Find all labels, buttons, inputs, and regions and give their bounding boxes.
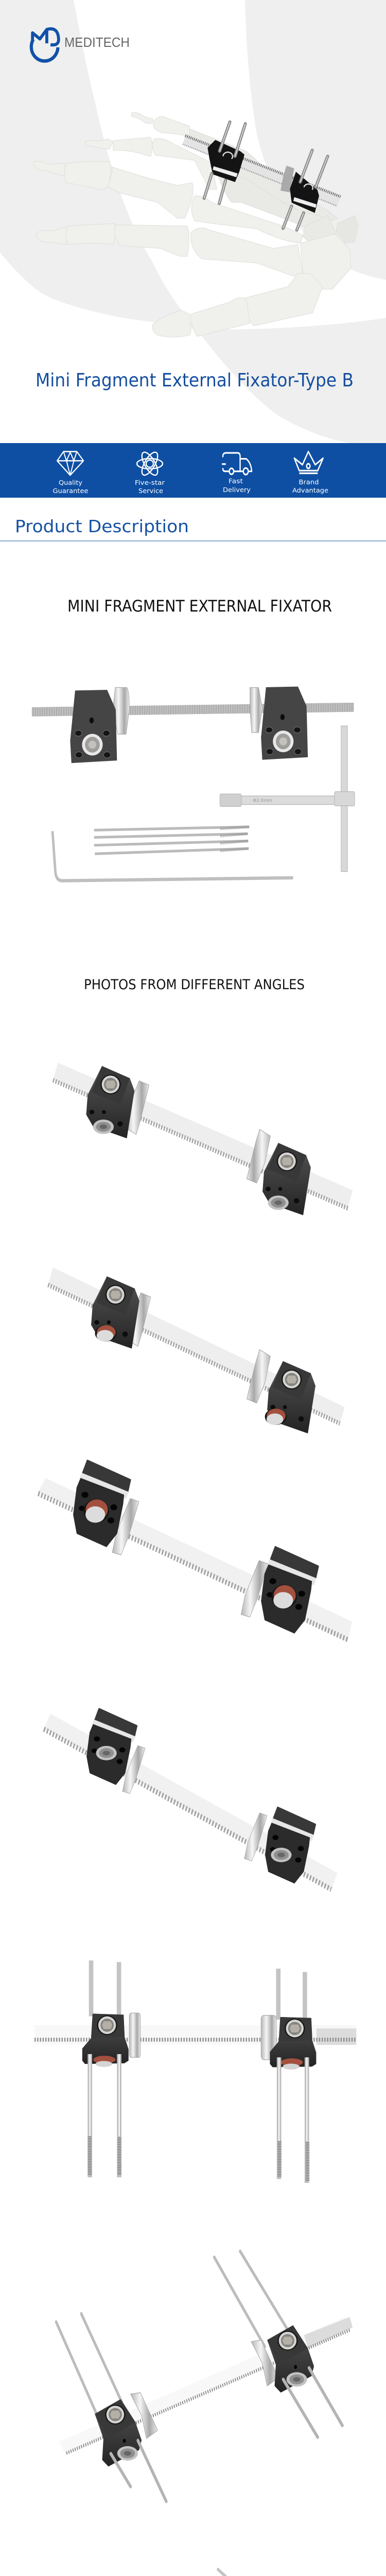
fixator on hand: [183, 122, 341, 230]
photo 2: top angle, red seals: [48, 1267, 345, 1433]
icon: crown: [294, 452, 323, 473]
icon: truck: [222, 453, 252, 474]
benefit labels: Five-star: [135, 479, 165, 486]
threaded rod with two clamps: [32, 687, 354, 763]
benefit labels: Brand: [299, 479, 319, 486]
photo 1: top angle, hex bolts: [53, 1063, 353, 1215]
photo 7: assembled angled view, red seals: [52, 2569, 355, 2576]
title: Mini Fragment External Fixator-Type B: [36, 370, 354, 391]
heading: product description: Product Description: [15, 516, 189, 536]
benefits banner: [0, 443, 386, 498]
product kit photo: [32, 687, 355, 881]
icon: atom: [137, 450, 163, 478]
T-handle wrench: [220, 726, 355, 872]
benefit labels: Delivery: [223, 486, 251, 494]
heading: mini fragment external fixator: MINI FRAGMENT EXTERNAL FIXATOR: [67, 597, 332, 616]
photo 5: assembled front view with vertical pins: [34, 1960, 356, 2183]
photo 6: assembled angled view, hex bolts: [56, 2251, 353, 2501]
photo 3: face view, red seals: [38, 1461, 352, 1641]
logo: Meditech: MEDITECH: [64, 35, 130, 50]
hero background: [0, 0, 386, 443]
hex key: [52, 831, 293, 881]
T-handle wrench: Φ2.0mm: [253, 798, 272, 803]
bone pins: [94, 827, 249, 854]
heading: photos from different angles: PHOTOS FROM DIFFERENT ANGLES: [84, 977, 305, 993]
benefit labels: [52, 478, 328, 495]
logo: Meditech: [31, 29, 130, 61]
hand skeleton: [33, 112, 358, 337]
benefit labels: Fast: [229, 478, 243, 485]
benefit labels: Quality: [59, 479, 82, 486]
benefit labels: Guarantee: [52, 487, 89, 495]
photo 4: face view, hex bolts: [44, 1709, 338, 1890]
benefit labels: Service: [138, 487, 163, 495]
benefit labels: Advantage: [292, 487, 328, 494]
icon: diamond: [57, 452, 83, 475]
